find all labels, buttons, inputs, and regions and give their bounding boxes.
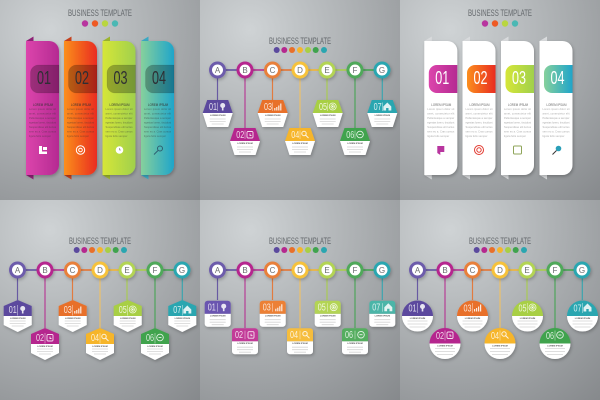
box 04: 04 [491, 331, 499, 342]
box 07: 07 [173, 305, 182, 316]
node timeline A to G: B [442, 266, 448, 275]
node timeline A to G: G [579, 266, 585, 275]
node timeline A to G: D [297, 66, 303, 75]
box 04: LOREM IPSUM [292, 343, 308, 345]
card 04: 04 [550, 68, 564, 88]
card 03: sem eu a. Cras cursus [106, 130, 133, 134]
heading: BUSINESS TEMPLATE [468, 8, 532, 18]
node timeline A to G: G [379, 66, 385, 75]
node timeline A to G: D [297, 266, 303, 275]
box 03: 03 [264, 102, 272, 113]
box 06 [342, 328, 368, 354]
box 06: 06 [546, 331, 554, 342]
box 01: LOREM IPSUM [210, 316, 226, 318]
box 01: 01 [408, 304, 417, 314]
box 07: LOREM IPSUM [375, 115, 390, 117]
box 01 [4, 300, 32, 332]
card 01: LOREM IPSUM [33, 103, 53, 107]
card 04: Lorem ipsum dolor sit [542, 107, 570, 111]
box 01: LOREM IPSUM [210, 115, 226, 117]
card 04: Suspendisse elit luctus [144, 125, 172, 129]
node timeline A to G: A [415, 266, 421, 275]
box 05 [313, 100, 343, 127]
box 04 [285, 128, 315, 155]
box 02 [232, 328, 258, 354]
legend dots [482, 20, 518, 27]
card 01: Suspendisse elit luctus [427, 125, 455, 129]
box 07 [367, 100, 397, 127]
node timeline A to G: B [42, 266, 48, 275]
box 05 [114, 300, 142, 332]
box 04: 04 [290, 330, 298, 341]
card 03 [501, 36, 534, 180]
box 02: LOREM IPSUM [37, 346, 53, 348]
box 04: 04 [91, 333, 99, 344]
heading: BUSINESS TEMPLATE [68, 8, 132, 18]
box 07 [168, 300, 196, 332]
box 02 [230, 128, 260, 155]
card 03: LOREM IPSUM [110, 103, 130, 107]
card 04: Lorem ipsum dolor sit [144, 107, 171, 111]
heading: BUSINESS TEMPLATE [469, 236, 531, 246]
panel: timeline circles [400, 200, 600, 400]
card 02: Suspendisse elit luctus [466, 125, 493, 129]
card 04: 04 [152, 68, 166, 88]
box 01: LOREM IPSUM [10, 318, 26, 320]
box 04 [484, 328, 516, 359]
card 02: ligula felis semper [67, 134, 89, 138]
panel: timeline flat hexagons [200, 0, 400, 200]
card 02 [462, 36, 496, 180]
node timeline A to G: F [353, 266, 358, 275]
node timeline A to G: D [497, 266, 503, 275]
card 02: sem eu a. Cras cursus [466, 130, 493, 134]
card 04: egestas lorem, tincidunt [144, 120, 171, 124]
panel: ribbon cards colored [0, 0, 200, 200]
card 01: 01 [435, 68, 449, 88]
card 01: amet, consectetur elit [29, 112, 56, 116]
card 02: Suspendisse elit luctus [67, 125, 95, 129]
card 01: Pellentesque a semper [29, 116, 56, 120]
box 06 [141, 328, 169, 360]
box 01 [203, 100, 233, 127]
box 07 [567, 300, 598, 332]
card 04: sem eu a. Cras cursus [542, 130, 570, 134]
box 01: LOREM IPSUM [410, 318, 425, 320]
card 01: Suspendisse elit luctus [29, 125, 57, 129]
stems [418, 278, 582, 328]
card 03: sem eu a. Cras cursus [504, 130, 532, 134]
card 04: sem eu a. Cras cursus [144, 130, 172, 134]
box 03: 03 [464, 304, 472, 314]
box 03 [260, 301, 286, 327]
card 01: ligula felis semper [427, 134, 449, 138]
card 03: egestas lorem, tincidunt [106, 120, 133, 124]
card 02: 02 [75, 68, 89, 88]
box 05: LOREM IPSUM [120, 318, 136, 320]
box 03: 03 [64, 305, 72, 316]
node timeline A to G [409, 262, 590, 278]
box 07: 07 [374, 102, 382, 113]
box 06: 06 [346, 130, 355, 141]
node timeline A to G: C [70, 266, 76, 275]
card 04: LOREM IPSUM [546, 103, 566, 107]
box 06: 06 [345, 330, 353, 341]
box 01: 01 [209, 102, 217, 113]
box 02 [430, 328, 460, 359]
box 01 [205, 301, 231, 327]
card 01: LOREM IPSUM [431, 103, 451, 107]
box 05: LOREM IPSUM [520, 318, 535, 320]
legend dots [82, 20, 118, 27]
box 03 [457, 300, 488, 332]
box 06: LOREM IPSUM [547, 346, 563, 348]
card 04 [141, 36, 174, 180]
card 01: amet, consectetur elit [427, 112, 455, 116]
card 04: Pellentesque a semper [542, 116, 570, 120]
node timeline A to G: A [215, 66, 221, 75]
box 03 [258, 100, 288, 127]
card 03: ligula felis semper [106, 134, 128, 138]
node timeline A to G: C [270, 266, 276, 275]
card 02: egestas lorem, tincidunt [466, 120, 493, 124]
box 02 [31, 328, 59, 360]
box 06: LOREM IPSUM [347, 343, 363, 345]
node timeline A to G [209, 62, 390, 78]
node timeline A to G: F [553, 266, 558, 275]
box 05: 05 [119, 305, 127, 316]
box 03 [59, 300, 87, 332]
box 05 [315, 301, 341, 327]
card 04: amet, consectetur elit [542, 112, 570, 116]
box 04: LOREM IPSUM [292, 143, 308, 145]
node timeline A to G: F [153, 266, 158, 275]
box 01: 01 [208, 303, 216, 314]
box 03: 03 [263, 303, 271, 314]
box 04: LOREM IPSUM [492, 346, 508, 348]
card 04: amet, consectetur elit [144, 112, 171, 116]
box 02: 02 [235, 330, 243, 341]
stems [18, 278, 182, 328]
node timeline A to G [9, 262, 190, 278]
node timeline A to G: G [379, 266, 385, 275]
box 04: LOREM IPSUM [92, 346, 108, 348]
box 03: LOREM IPSUM [265, 115, 281, 117]
node timeline A to G: G [179, 266, 185, 275]
legend dots [474, 247, 527, 253]
card 02: Pellentesque a semper [466, 116, 493, 120]
heading: BUSINESS TEMPLATE [269, 236, 331, 246]
card 01: 01 [37, 68, 51, 88]
card 03 [102, 36, 136, 180]
box 07: LOREM IPSUM [175, 318, 190, 320]
card 03: amet, consectetur elit [504, 112, 531, 116]
heading: BUSINESS TEMPLATE [69, 236, 131, 246]
node timeline A to G: A [215, 266, 221, 275]
box 07: LOREM IPSUM [575, 318, 590, 320]
box 07: 07 [372, 303, 381, 314]
box 07: 07 [574, 304, 582, 314]
card 03: amet, consectetur elit [106, 112, 133, 116]
stems [218, 78, 382, 128]
card 02: Lorem ipsum dolor sit [67, 107, 94, 111]
node timeline A to G: E [324, 66, 330, 75]
card 04: ligula felis semper [144, 134, 166, 138]
panel: timeline rounded boxes [200, 200, 400, 400]
box 06: 06 [146, 333, 154, 344]
box 02: LOREM IPSUM [237, 143, 253, 145]
box 06: LOREM IPSUM [147, 346, 163, 348]
node timeline A to G: E [324, 266, 330, 275]
card 01 [26, 36, 59, 180]
box 05: 05 [518, 304, 527, 314]
card 02: ligula felis semper [466, 134, 488, 138]
card 03: Lorem ipsum dolor sit [106, 107, 133, 111]
stems [218, 278, 382, 328]
card 01: Lorem ipsum dolor sit [427, 107, 455, 111]
card 01: sem eu a. Cras cursus [29, 130, 57, 134]
box 06 [540, 328, 570, 359]
card 03: 03 [512, 68, 526, 88]
card 02: Lorem ipsum dolor sit [466, 107, 493, 111]
box 01: 01 [9, 305, 17, 316]
card 04: LOREM IPSUM [148, 103, 168, 107]
card 01: egestas lorem, tincidunt [427, 120, 455, 124]
box 02: LOREM IPSUM [237, 343, 253, 345]
panel: timeline pointed hexagons [0, 200, 200, 400]
card 01 [424, 36, 457, 180]
node timeline A to G: A [15, 266, 21, 275]
box 02: 02 [236, 130, 245, 141]
card 03: Lorem ipsum dolor sit [504, 107, 531, 111]
box 04: 04 [291, 130, 300, 141]
node timeline A to G [209, 262, 390, 278]
card 04: Pellentesque a semper [144, 116, 171, 120]
box 02: 02 [436, 331, 444, 342]
card 02: LOREM IPSUM [470, 103, 490, 107]
node timeline A to G: F [353, 66, 358, 75]
card 04: ligula felis semper [542, 134, 565, 138]
card 03: Suspendisse elit luctus [106, 125, 133, 129]
card 01: sem eu a. Cras cursus [427, 130, 455, 134]
legend dots [274, 47, 327, 53]
card 02: LOREM IPSUM [71, 103, 91, 107]
heading: BUSINESS TEMPLATE [269, 36, 331, 46]
card 03: Suspendisse elit luctus [504, 125, 532, 129]
legend dots [74, 247, 127, 253]
node timeline A to G: C [470, 266, 476, 275]
box 06 [340, 128, 370, 155]
card 03: ligula felis semper [504, 134, 526, 138]
card 04 [540, 36, 572, 180]
card 02 [64, 36, 97, 180]
panel: ribbon cards white [400, 0, 600, 200]
card 03: Pellentesque a semper [106, 116, 133, 120]
node timeline A to G: C [270, 66, 276, 75]
box 04 [287, 328, 313, 354]
node timeline A to G: E [124, 266, 130, 275]
box 06: LOREM IPSUM [347, 143, 363, 145]
card 02: 02 [474, 68, 488, 88]
legend dots [274, 247, 327, 253]
box 05: 05 [318, 303, 326, 314]
card 03: LOREM IPSUM [508, 103, 528, 107]
box 05: 05 [319, 102, 327, 113]
card 03: Pellentesque a semper [504, 116, 531, 120]
box 05 [512, 300, 543, 332]
card 03: egestas lorem, tincidunt [504, 120, 531, 124]
card 01: ligula felis semper [29, 134, 51, 138]
box 03: LOREM IPSUM [265, 316, 281, 318]
card 02: amet, consectetur elit [67, 112, 94, 116]
node timeline A to G: E [524, 266, 530, 275]
card 02: amet, consectetur elit [466, 112, 493, 116]
box 01 [402, 300, 433, 332]
card 04: Suspendisse elit luctus [542, 125, 570, 129]
card 01: Pellentesque a semper [427, 116, 454, 120]
card 01: Lorem ipsum dolor sit [29, 107, 56, 111]
node timeline A to G: D [97, 266, 103, 275]
box 03: LOREM IPSUM [65, 318, 81, 320]
node timeline A to G: B [242, 66, 248, 75]
box 03: LOREM IPSUM [465, 318, 480, 320]
card 02: sem eu a. Cras cursus [67, 130, 95, 134]
box 07: LOREM IPSUM [375, 316, 390, 318]
box 02: 02 [36, 333, 44, 344]
box 05: LOREM IPSUM [320, 316, 336, 318]
card 04: egestas lorem, tincidunt [542, 120, 570, 124]
box 04 [86, 328, 114, 360]
box 02: LOREM IPSUM [437, 346, 453, 348]
box 05: LOREM IPSUM [320, 115, 336, 117]
card 03: 03 [114, 68, 128, 88]
card 01: egestas lorem, tincidunt [29, 120, 56, 124]
box 07 [369, 301, 395, 327]
card 02: egestas lorem, tincidunt [67, 120, 94, 124]
card 02: Pellentesque a semper [67, 116, 94, 120]
node timeline A to G: B [242, 266, 248, 275]
